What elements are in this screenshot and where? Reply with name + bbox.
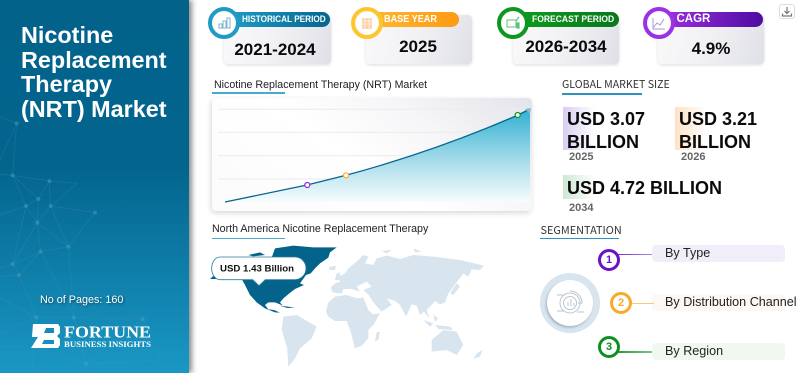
- label pill: CAGR: [665, 12, 763, 27]
- value: base year: 2025: [399, 37, 437, 56]
- number badge 2: [610, 292, 632, 314]
- label pill: base year: BASE YEAR: [384, 14, 437, 25]
- market size 2034: [563, 175, 722, 214]
- label: By Region: By Region: [665, 344, 723, 358]
- market size 2026: USD 3.21: [679, 109, 757, 129]
- logo: Fortune Business Insights: FORTUNE: [64, 322, 151, 342]
- label pill: historical period: [230, 12, 330, 27]
- logo: Fortune Business Insights: [31, 322, 151, 349]
- logo: Fortune Business Insights: BUSINESS INSIGHTS: [64, 340, 151, 349]
- market size 2034: USD 4.72 BILLION: [567, 178, 722, 198]
- network pattern: [0, 116, 161, 373]
- icon: bar chart: [208, 7, 240, 39]
- heading: market chart: Nicotine Replacement Therapy (NRT) Market: [214, 79, 427, 91]
- label: By Type: By Type: [665, 246, 710, 260]
- market size 2025: USD 3.07: [567, 109, 645, 129]
- segment 2: By Distribution Channel: [610, 292, 797, 314]
- icon: growth chart: [643, 7, 675, 39]
- panel: CAGR: [643, 7, 765, 66]
- number badge 3: 3: [606, 341, 612, 353]
- market size 2025: BILLION: [567, 132, 639, 152]
- panel: base year: [351, 7, 473, 66]
- page count: No of Pages: 160: [40, 294, 123, 306]
- marker: 2034: [515, 112, 520, 118]
- market size 2034: 2034: [569, 202, 593, 214]
- continents: [282, 248, 484, 367]
- marker: 2026: [344, 173, 348, 178]
- callout: USD 1.43 Billion: USD 1.43 Billion: [220, 264, 294, 275]
- label: By Distribution Channel: By Distribution Channel: [665, 295, 797, 309]
- callout: USD 1.43 Billion: [212, 257, 306, 286]
- marker: 2025: [305, 182, 310, 188]
- icon: segmentation hub: [540, 273, 600, 333]
- title: Nicotine: [21, 22, 113, 48]
- icon: calendar: [351, 7, 383, 39]
- heading: North America: North America Nicotine Replacement Therapy: [212, 223, 428, 235]
- label pill: forecast period: [520, 12, 619, 27]
- chart: market growth curve: [212, 98, 532, 211]
- number badge 1: [598, 249, 620, 271]
- icon: download: [779, 4, 795, 19]
- number badge 1: 1: [606, 254, 612, 266]
- panel: left sidebar: [0, 0, 189, 373]
- title: Therapy: [21, 71, 112, 97]
- market size 2026: 2026: [681, 151, 705, 163]
- label pill: historical period: HISTORICAL PERIOD: [242, 14, 326, 25]
- icon: forecast chart: [497, 7, 529, 39]
- title: [21, 22, 167, 122]
- North America: [210, 246, 337, 313]
- heading: global market size: GLOBAL MARKET SIZE: [562, 77, 670, 92]
- market size 2025: 2025: [569, 151, 593, 163]
- value: historical years: 2021-2024: [234, 40, 316, 58]
- title: Replacement: [21, 47, 167, 73]
- value: forecast years: 2026-2034: [525, 37, 607, 56]
- heading: segmentation: SEGMENTATION: [540, 222, 622, 238]
- label pill: base year: [372, 12, 459, 27]
- number badge 2: 2: [618, 297, 624, 309]
- title: (NRT) Market: [21, 96, 167, 122]
- value: CAGR: 4.9%: [692, 38, 730, 58]
- map: world with North America highlighted: [210, 246, 484, 366]
- market size 2025: [563, 107, 645, 163]
- label pill: forecast period: FORECAST PERIOD: [532, 14, 614, 25]
- market size 2026: BILLION: [679, 132, 751, 152]
- label pill: CAGR: CAGR: [676, 13, 710, 25]
- panel: forecast period: [497, 7, 620, 66]
- number badge 3: [598, 336, 620, 358]
- segment 3: By Region: [598, 336, 785, 360]
- market size 2026: [675, 107, 757, 163]
- segment 1: By Type: [598, 245, 785, 271]
- panel: historical period: [208, 7, 332, 66]
